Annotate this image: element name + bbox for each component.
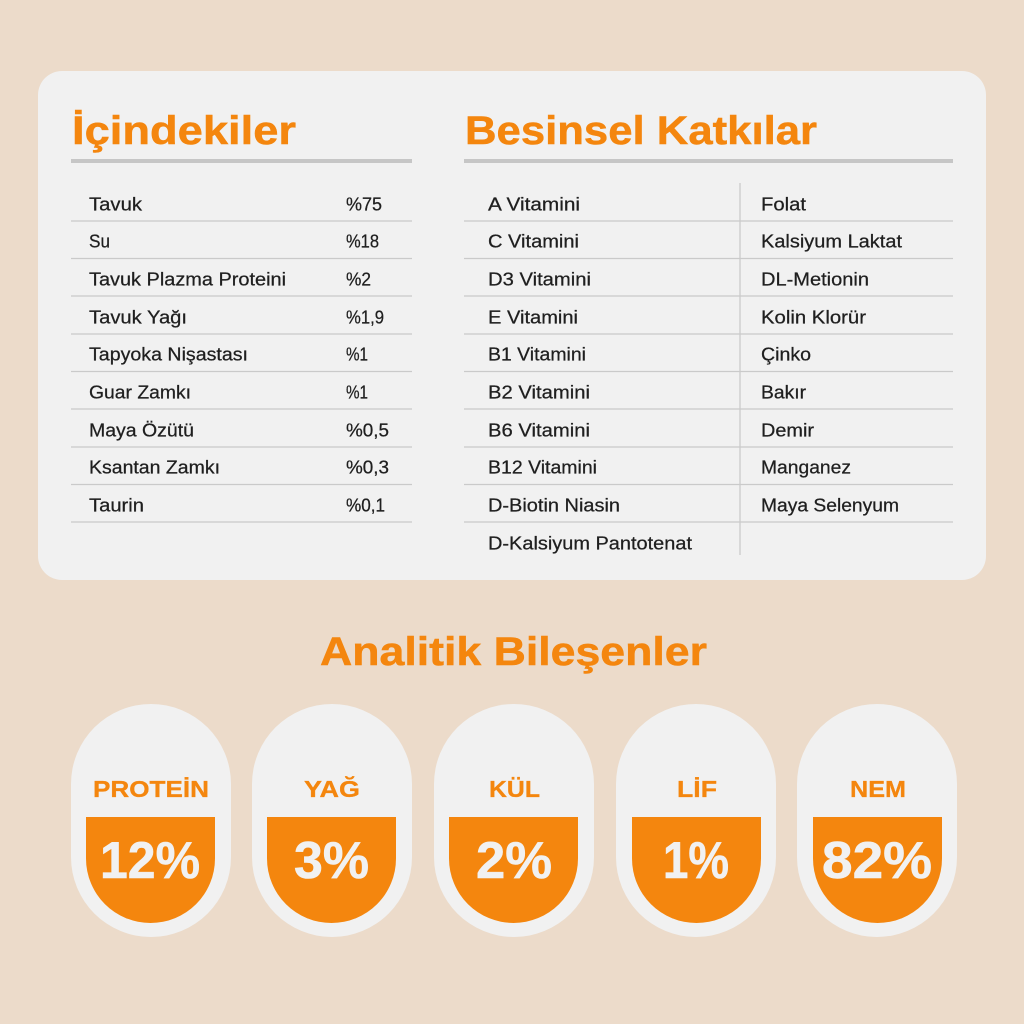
table: nutritional additives: Bakır — [761, 382, 806, 402]
card: fat 3%: 3% — [294, 832, 369, 890]
table: ingredients: %0,5 — [346, 420, 389, 440]
table: nutritional additives: Folat — [761, 194, 806, 214]
card: fat 3% — [252, 704, 412, 937]
card: ash 2%: 2% — [476, 832, 552, 890]
table: ingredients: Su — [89, 232, 110, 252]
table: nutritional additives: D-Kalsiyum Pantotenat — [488, 534, 692, 554]
table: ingredients: %75 — [346, 194, 382, 214]
card: ash 2% — [434, 704, 594, 937]
table: ingredients: Maya Özütü — [89, 420, 194, 440]
table: nutritional additives: A Vitamini — [488, 194, 580, 214]
card: protein 12%: 12% — [100, 832, 200, 890]
table: nutritional additives: Manganez — [761, 458, 851, 478]
table: ingredients — [71, 161, 412, 522]
table: ingredients: Guar Zamkı — [89, 382, 191, 402]
table: ingredients: %1 — [346, 344, 368, 364]
table: ingredients: Ksantan Zamkı — [89, 458, 220, 478]
table: ingredients: %18 — [346, 232, 379, 252]
card: ash 2%: KÜL — [489, 776, 540, 802]
card: protein 12%: PROTEİN — [93, 776, 209, 802]
table: ingredients: Tapyoka Nişastası — [89, 344, 248, 364]
card: fibre 1%: 1% — [663, 832, 729, 890]
table: nutritional additives: B6 Vitamini — [488, 420, 590, 440]
table: nutritional additives: B1 Vitamini — [488, 344, 586, 364]
table: nutritional additives: Çinko — [761, 344, 811, 364]
table: nutritional additives: C Vitamini — [488, 232, 579, 252]
panel: ingredients and additives — [38, 71, 986, 580]
heading: Besinsel Katkılar: Besinsel Katkılar — [465, 109, 817, 153]
table: ingredients: %0,1 — [346, 496, 385, 516]
card: fat 3%: YAĞ — [304, 775, 360, 802]
table: nutritional additives: E Vitamini — [488, 308, 578, 328]
table: ingredients: %1 — [346, 382, 368, 402]
table: ingredients: Tavuk Plazma Proteini — [89, 270, 286, 290]
card: fibre 1% — [616, 704, 776, 937]
card: fibre 1%: LİF — [677, 776, 717, 802]
table: ingredients: Tavuk Yağı — [89, 308, 187, 328]
table: nutritional additives: DL-Metionin — [761, 270, 869, 290]
heading: İçindekiler: İçindekiler — [72, 109, 296, 153]
card: protein 12% — [71, 704, 231, 937]
table: nutritional additives: D3 Vitamini — [488, 270, 591, 290]
table: nutritional additives: D-Biotin Niasin — [488, 496, 620, 516]
table: ingredients: Taurin — [89, 496, 144, 516]
card: moisture 82%: NEM — [850, 776, 906, 802]
table: nutritional additives: Kalsiyum Laktat — [761, 232, 902, 252]
table: nutritional additives: B2 Vitamini — [488, 382, 590, 402]
table: nutritional additives: Kolin Klorür — [761, 308, 866, 328]
table: nutritional additives — [464, 161, 953, 555]
table: ingredients: %1,9 — [346, 308, 384, 328]
table: nutritional additives: B12 Vitamini — [488, 458, 597, 478]
heading: Analitik Bileşenler: Analitik Bileşenler — [320, 630, 707, 674]
table: ingredients: %2 — [346, 270, 371, 290]
card: moisture 82% — [797, 704, 957, 937]
table: nutritional additives: Maya Selenyum — [761, 496, 899, 516]
table: ingredients: Tavuk — [89, 194, 143, 214]
table: nutritional additives: Demir — [761, 420, 814, 440]
table: ingredients: %0,3 — [346, 458, 389, 478]
card: moisture 82%: 82% — [822, 832, 932, 890]
